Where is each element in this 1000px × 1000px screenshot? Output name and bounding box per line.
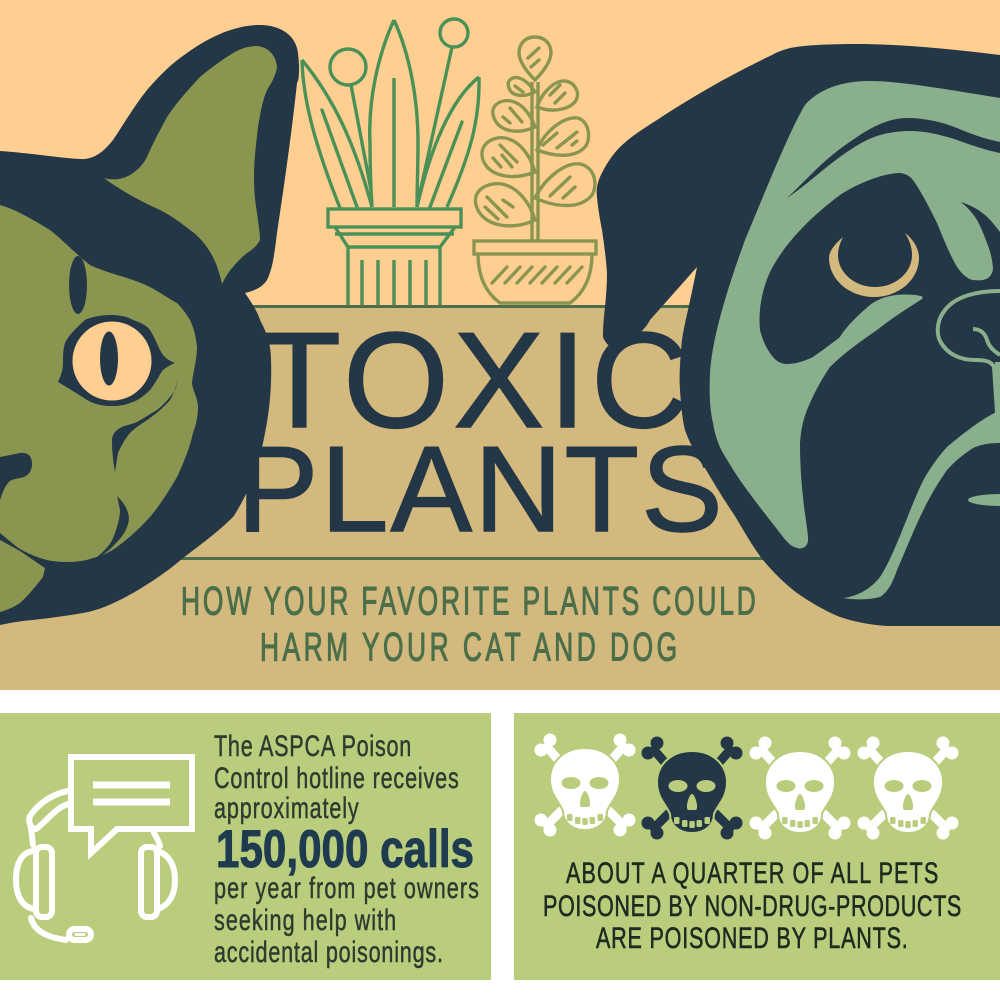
- plant: snake plant in column pot: [302, 19, 479, 305]
- hotline text: 150,000 calls: [216, 820, 474, 879]
- dog brow wrinkle: [787, 118, 1000, 198]
- title: [237, 304, 725, 557]
- icon: headset with speech bubble: [16, 757, 192, 940]
- poisoning statistic text: POISONED BY NON-DRUG-PRODUCTS: [543, 888, 961, 923]
- cat face: [0, 205, 198, 562]
- poisoning statistic text: [543, 855, 961, 955]
- cat eye: [58, 315, 175, 406]
- cat chin: [0, 540, 45, 612]
- hotline text: accidental poisonings.: [214, 934, 443, 969]
- panel: hotline calls: [0, 713, 491, 980]
- dog illustration: [597, 44, 1000, 626]
- cat outline: [0, 25, 299, 625]
- dog muzzle side: [995, 362, 1000, 413]
- icon: white skull 4: [858, 736, 958, 840]
- icon: white skull 3: [750, 736, 850, 840]
- header background: [0, 0, 1000, 690]
- panel: poisoned by plants: [514, 713, 1000, 980]
- title: PLANTS: [237, 421, 725, 557]
- dog nose outline: [938, 291, 1000, 412]
- hotline text: approximately: [214, 790, 359, 825]
- dog face: [710, 81, 1000, 548]
- dog head outline: [597, 44, 1000, 626]
- poisoning statistic text: ABOUT A QUARTER OF ALL PETS: [566, 855, 938, 890]
- cat cheek lines: [93, 378, 177, 560]
- hotline text: [214, 728, 479, 969]
- hotline text: The ASPCA Poison: [214, 728, 411, 763]
- subtitle: HARM YOUR CAT AND DOG: [260, 625, 677, 670]
- subtitle: [181, 579, 756, 670]
- poisoning statistic text: ARE POISONED BY PLANTS.: [596, 920, 908, 955]
- hotline text: per year from pet owners: [214, 870, 479, 905]
- cat illustration: [0, 25, 299, 625]
- plant: round-leaf plant in bowl: [474, 37, 596, 303]
- dog mouth: [968, 494, 1000, 506]
- cat nose: [0, 453, 32, 500]
- dog eye: [829, 233, 919, 297]
- icon: dark skull: [642, 736, 742, 840]
- cat ear: [104, 46, 277, 284]
- hotline text: seeking help with: [214, 902, 396, 937]
- title: TOXIC: [258, 304, 694, 456]
- hotline text: Control hotline receives: [214, 760, 459, 795]
- cat forehead mark: [69, 256, 87, 314]
- icon: white skull 1: [534, 734, 636, 836]
- subtitle: HOW YOUR FAVORITE PLANTS COULD: [181, 579, 756, 624]
- dog jowl line: [843, 410, 1000, 599]
